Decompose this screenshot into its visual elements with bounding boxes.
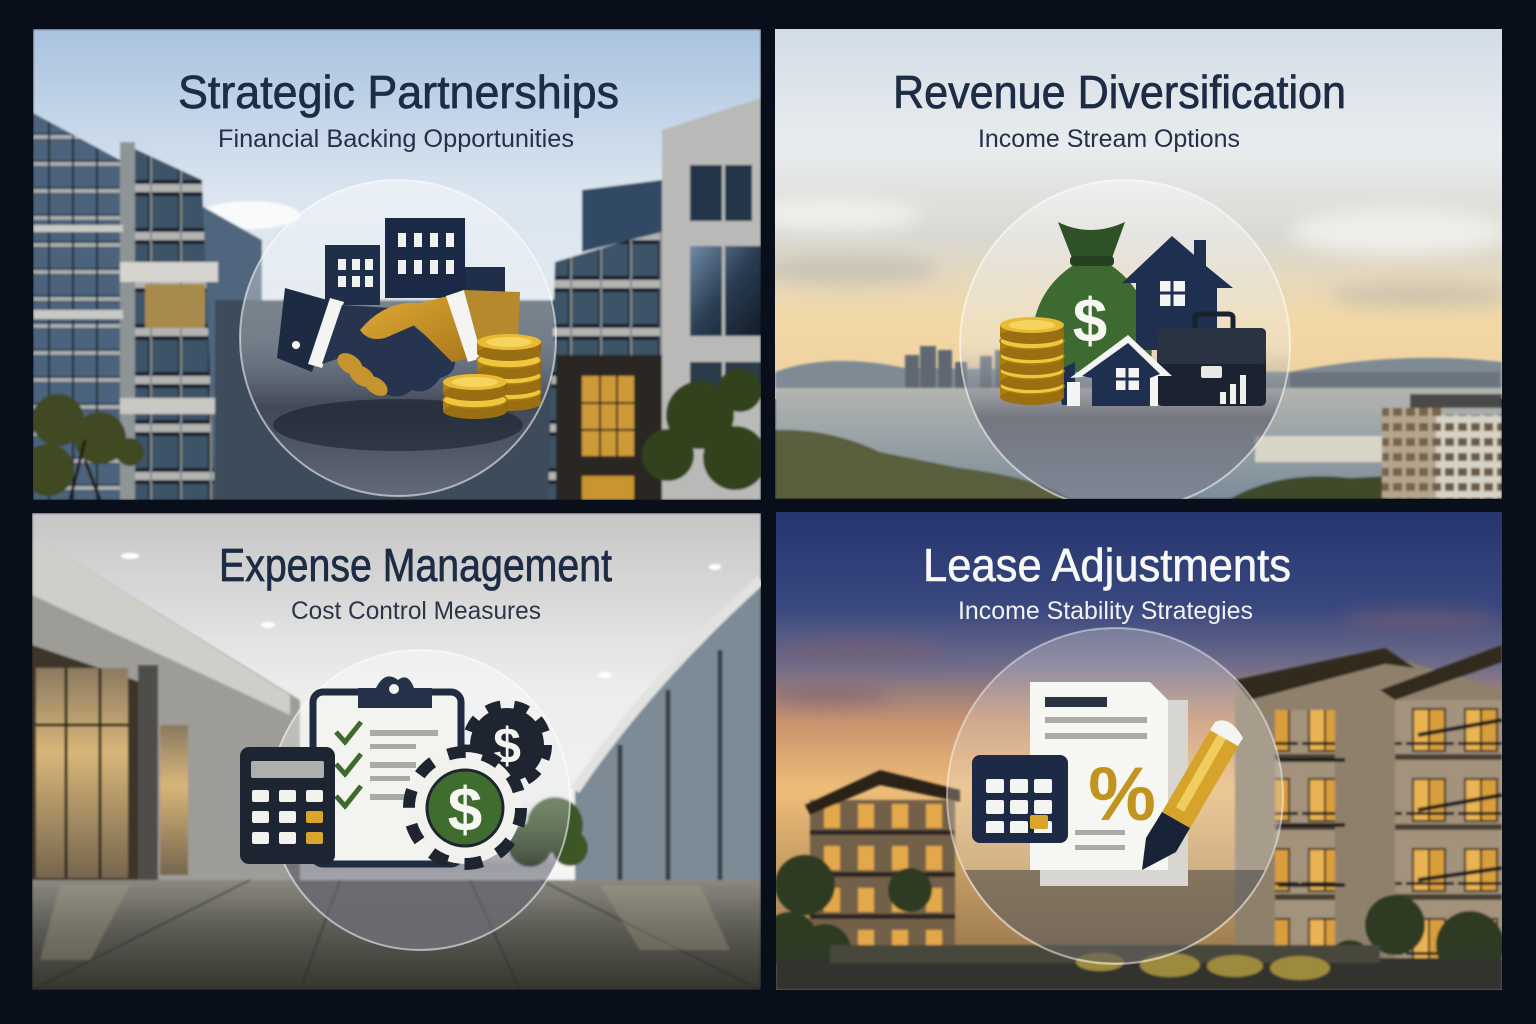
- icon: large gear: [409, 752, 521, 864]
- glass circle: [947, 628, 1283, 964]
- icon: small house: [1055, 335, 1172, 406]
- photo: office towers: [22, 29, 767, 500]
- subheading: Income Stability Strategies: [958, 597, 1253, 625]
- icon: briefcase: [1157, 314, 1266, 406]
- heading: Lease Adjustments: [923, 539, 1291, 591]
- lower circle shade: [965, 870, 1265, 962]
- icon: small gear: [468, 706, 546, 784]
- icon: calendar calculator: [972, 755, 1068, 843]
- icon: small gear: $: [493, 718, 521, 774]
- panel: revenue diversification: [740, 29, 1510, 510]
- icon: money bag: [1032, 222, 1152, 372]
- photo: harbour skyline: [740, 29, 1510, 499]
- heading: Strategic Partnerships: [178, 66, 619, 118]
- panel: expense management: [32, 513, 761, 990]
- icon: clipboard: [313, 676, 461, 864]
- heading: Expense Management: [219, 539, 612, 591]
- photo: office corridor: [32, 513, 761, 990]
- glass circle: [240, 180, 556, 496]
- icon: coin stacks: [443, 334, 541, 419]
- subheading: Cost Control Measures: [291, 597, 541, 625]
- icon: large house: [1122, 236, 1233, 350]
- icon: pen: [1142, 720, 1243, 870]
- subheading: Financial Backing Opportunities: [218, 125, 574, 153]
- icon: lease document: [1030, 682, 1188, 886]
- photo: apartments at dusk: [762, 512, 1504, 990]
- glass circle: [270, 650, 570, 950]
- icon: lease document: %: [1088, 752, 1156, 837]
- reflective floor: [273, 399, 523, 451]
- icon: coin stack: [1000, 317, 1064, 405]
- icon: city buildings: [325, 218, 505, 305]
- heading: Revenue Diversification: [893, 66, 1346, 118]
- icon: money bag: $: [1073, 287, 1107, 356]
- icon: calculator: [240, 747, 335, 864]
- subheading: Income Stream Options: [978, 125, 1240, 153]
- icon: handshake: [277, 288, 520, 400]
- icon: large gear: $: [448, 776, 482, 845]
- panel: lease adjustments: [762, 512, 1504, 990]
- panel: strategic partnerships: [22, 29, 767, 500]
- glass circle: [960, 180, 1290, 510]
